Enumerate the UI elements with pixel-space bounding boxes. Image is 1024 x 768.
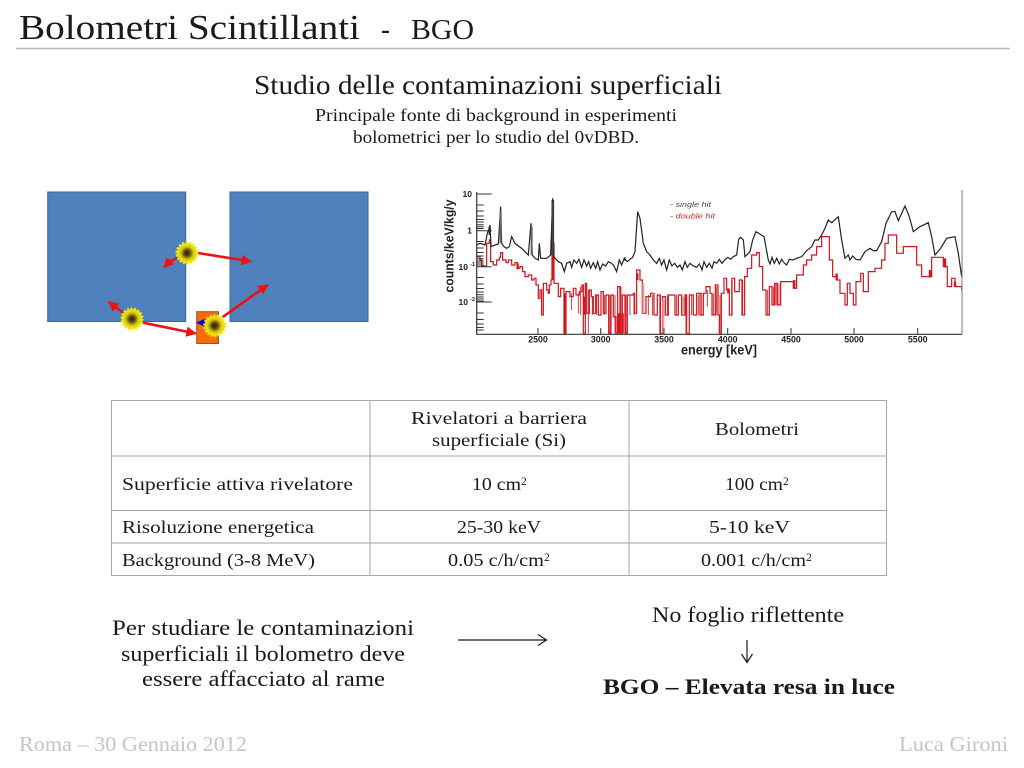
header row: Rivelatori a barriera: [411, 408, 587, 428]
header row: Bolometri: [715, 419, 799, 439]
text block: study note: Per studiare le contaminazioni: [112, 615, 414, 640]
row: background: 2: [806, 552, 812, 564]
footer: date: Roma – 30 Gennaio 2012: [19, 732, 247, 756]
row: active surface: 100 cm: [725, 474, 783, 494]
table grid: [112, 400, 886, 576]
row: energy resolution: 5-10 keV: [709, 517, 790, 537]
x tick labels: 4000: [718, 334, 738, 344]
arrow: down: [742, 640, 752, 662]
row: background: [122, 550, 812, 571]
row: background: Background (3-8 MeV): [122, 550, 315, 571]
x tick labels: 4500: [781, 334, 801, 344]
row: active surface: 10 cm: [472, 474, 521, 494]
row: background: 2: [544, 552, 550, 564]
title: -: [381, 13, 390, 46]
spectrum traces: [477, 198, 962, 333]
x axis label: energy [keV]: [681, 342, 757, 358]
text block: intro: [315, 105, 677, 147]
header row: superficiale (Si): [432, 430, 566, 451]
chart: energy spectrum: [442, 189, 962, 358]
legend: [670, 200, 716, 220]
title: [19, 8, 474, 47]
row: background: 0.05 c/h/cm: [448, 550, 544, 570]
row: energy resolution: 25-30 keV: [457, 517, 541, 537]
text block: study note: superficiali il bolometro deve: [121, 641, 405, 666]
heading: section subtitle: Studio delle contaminazioni superficiali: [254, 69, 722, 100]
row: active surface: 2: [521, 476, 527, 488]
source: lower left: [122, 309, 142, 329]
y tick labels: 10: [463, 189, 472, 199]
title: BGO: [411, 15, 474, 46]
y tick labels: -2: [470, 297, 475, 303]
row: active surface: Superficie attiva rivelatore: [122, 474, 353, 494]
text: no reflective foil: No foglio riflettente: [652, 602, 844, 627]
legend: - double hit: [670, 212, 716, 220]
x tick labels: [528, 334, 928, 344]
y tick labels: [459, 189, 475, 307]
x tick labels: 2500: [528, 334, 548, 344]
red decay arrows: [109, 253, 268, 334]
row: energy resolution: Risoluzione energetica: [122, 517, 314, 537]
text: conclusion: BGO – Elevata resa in luce: [603, 674, 895, 699]
title: Bolometri Scintillanti: [19, 8, 360, 47]
y axis label: counts/keV/kg/y: [442, 199, 456, 292]
source: on detector: [205, 316, 225, 336]
blue arrow: [197, 322, 206, 324]
right crystal: [230, 192, 368, 322]
header row: [411, 408, 799, 451]
row: active surface: 2: [783, 476, 789, 488]
orange detector: [197, 312, 218, 344]
diagram: surface contamination: [48, 192, 368, 344]
footer: author: Luca Gironi: [899, 732, 1008, 756]
text block: intro: bolometrici per lo studio del 0vDBD.: [353, 127, 639, 147]
x tick labels: 3500: [654, 334, 674, 344]
row: active surface: [122, 474, 789, 494]
y tick labels: 10: [459, 297, 468, 307]
left crystal: [48, 192, 186, 322]
text block: study note: essere affacciato al rame: [142, 666, 385, 691]
text block: study note: [112, 615, 414, 691]
y tick labels: -1: [470, 262, 475, 268]
legend: - single hit: [670, 200, 712, 209]
source: upper: [177, 243, 197, 263]
x tick labels: 5500: [908, 334, 928, 344]
x tick labels: 5000: [844, 334, 864, 344]
arrow: leads to: [458, 634, 546, 646]
axes: [477, 190, 962, 334]
table: comparison: [112, 400, 886, 576]
y tick labels: 10: [459, 262, 468, 272]
text block: intro: Principale fonte di background in esperimenti: [315, 105, 677, 125]
y tick labels: 1: [467, 226, 472, 236]
x tick labels: 3000: [591, 334, 611, 344]
row: background: 0.001 c/h/cm: [701, 550, 806, 570]
row: energy resolution: [122, 517, 790, 537]
